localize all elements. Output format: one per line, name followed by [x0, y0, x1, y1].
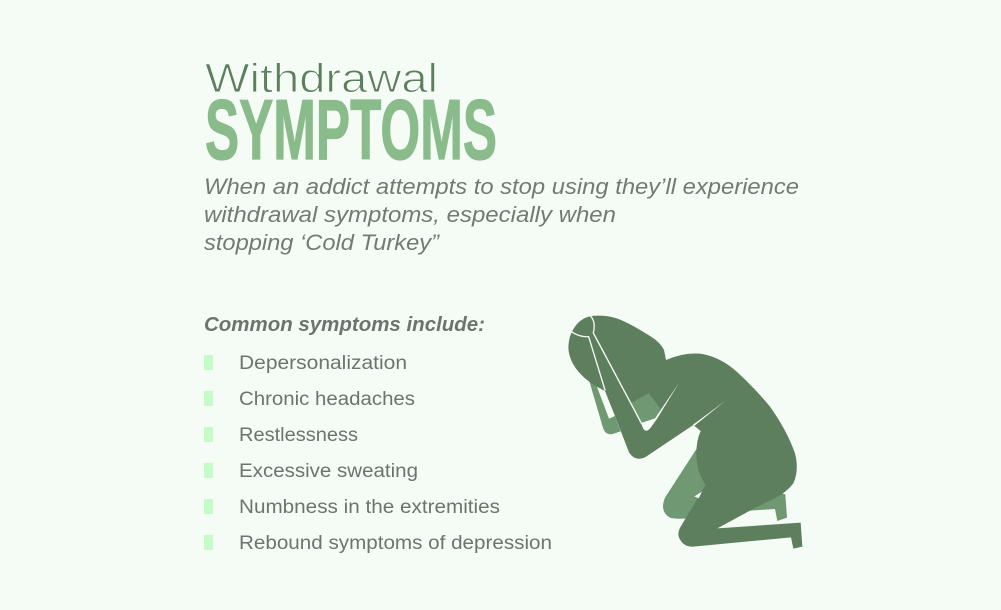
intro text block: withdrawal symptoms, especially when: [204, 202, 616, 227]
far arm: [589, 379, 621, 434]
list item: Rebound symptoms of depression: Rebound symptoms of depression: [239, 533, 552, 554]
list item: Restlessness: Restlessness: [239, 425, 358, 446]
intro text block: [204, 174, 799, 255]
intro text block: stopping ‘Cold Turkey”: [204, 230, 441, 255]
list item: Depersonalization: Depersonalization: [239, 353, 407, 374]
symptoms list: [204, 353, 552, 554]
hands and gaps between arms: [571, 316, 642, 424]
white wedge between forearms: [641, 382, 679, 431]
list item: Excessive sweating: Excessive sweating: [239, 461, 418, 482]
title: Withdrawal: Withdrawal: [205, 55, 438, 101]
list heading: Common symptoms include:: [204, 314, 485, 336]
gap along the torso: [693, 401, 725, 426]
gap under knee: [694, 492, 702, 498]
far foot: [745, 492, 787, 521]
title: SYMPTOMS: SYMPTOMS: [205, 83, 497, 178]
body silhouette: [568, 316, 802, 549]
list item: Numbness in the extremities: Numbness in the extremities: [239, 497, 500, 518]
illustration: person crouching with head in hands: [568, 316, 802, 549]
far forearm visible between the arms: [631, 393, 661, 424]
list item: Chronic headaches: Chronic headaches: [239, 389, 415, 410]
far leg: [663, 448, 708, 519]
intro text block: When an addict attempts to stop using they’ll experience: [204, 174, 799, 199]
